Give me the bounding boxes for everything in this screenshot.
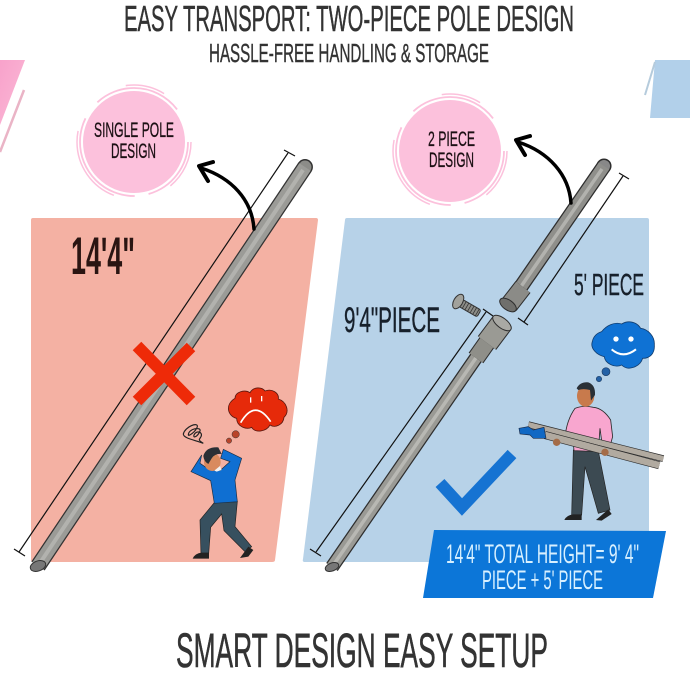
single long pole (29, 160, 312, 573)
9'4" piece label: 9'4"PIECE (344, 301, 440, 340)
arrow to single pole badge (199, 162, 254, 229)
single pole design badge (77, 85, 191, 199)
14'4" label: 14'4" (71, 227, 135, 286)
single pole design badge: DESIGN (111, 140, 156, 163)
dimension line: 5' piece (518, 173, 629, 325)
5' piece label: 5' PIECE (574, 267, 644, 302)
icon: red cross (137, 346, 191, 401)
decorative blue corner (645, 60, 690, 118)
decorative pink corner (0, 60, 25, 152)
icon: happy thought bubble (592, 322, 654, 382)
lower pole piece (324, 312, 514, 573)
arrow to two piece badge (516, 136, 571, 203)
two piece design badge: 2 PIECE (428, 128, 475, 151)
dimension line: 14'4" (14, 150, 295, 556)
panel: single pole background (31, 218, 318, 562)
single pole design badge: SINGLE POLE (94, 119, 174, 142)
icon: blue check mark (440, 454, 512, 507)
dimension line: 9'4" piece (310, 309, 493, 556)
two piece design badge (393, 94, 507, 208)
icon: scribble (183, 425, 203, 443)
icon: screw (450, 292, 483, 320)
banner: total height (423, 530, 666, 598)
icon: frustrated person (191, 447, 253, 559)
upper pole piece (497, 159, 611, 315)
icon: happy person carrying poles (519, 382, 663, 521)
subtitle: HASSLE-FREE HANDLING & STORAGE (209, 38, 489, 68)
two piece design badge: DESIGN (429, 149, 474, 172)
icon: sad thought bubble (226, 388, 287, 443)
panel: two piece background (303, 218, 649, 562)
banner: total height: PIECE + 5' PIECE (482, 565, 603, 595)
